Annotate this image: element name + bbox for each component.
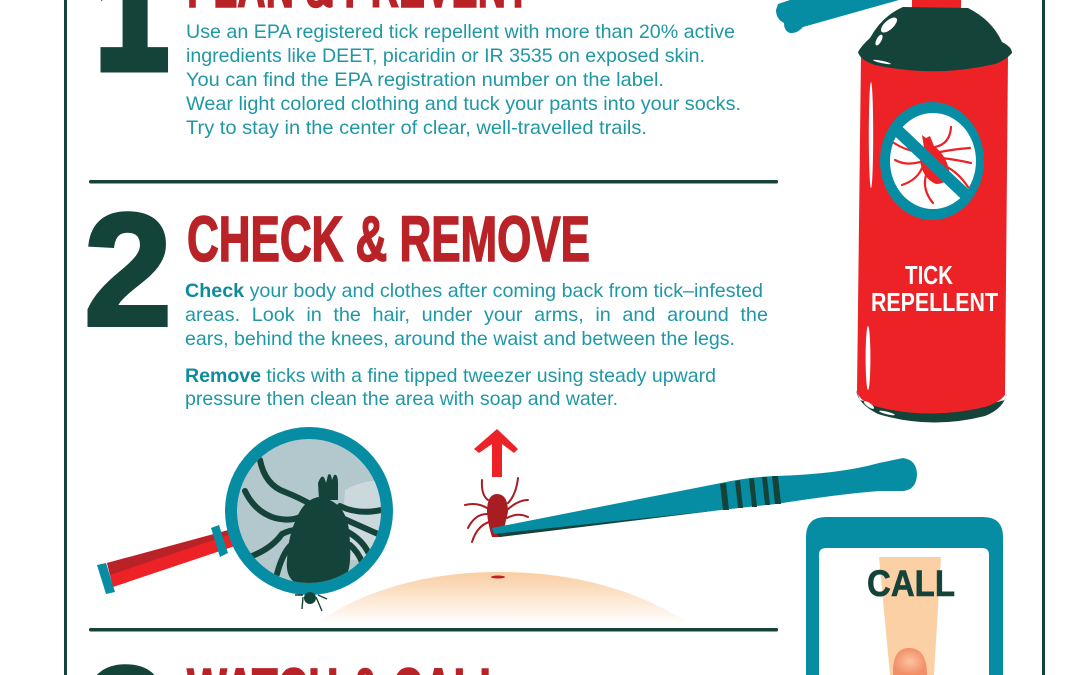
phone body	[806, 517, 1003, 675]
body text: check instructions: ears, behind the knees, around the waist and between the legs.	[185, 328, 735, 350]
body text: prevention advice: You can find the EPA registration number on the label.	[186, 69, 664, 91]
tweezers grip	[720, 476, 781, 510]
red tick	[894, 127, 971, 203]
body text: prevention advice: Use an EPA registered tick repellent with more than 20% active	[186, 21, 735, 43]
call label: CALL	[867, 563, 955, 604]
finger	[879, 557, 941, 675]
can nozzle	[912, 0, 961, 12]
numeral 2: 2	[84, 180, 172, 359]
body text: check instructions: Check your body and clothes after coming back from tick–infested	[185, 280, 763, 302]
icon: tick repellent spray can	[776, 0, 1012, 423]
body text: removal instructions	[185, 365, 716, 410]
prohibition bar	[896, 129, 969, 198]
fingernail	[893, 648, 927, 675]
body text: prevention advice: ingredients like DEET, picaridin or IR 3535 on exposed skin.	[186, 45, 705, 67]
can label: TICK	[905, 260, 953, 290]
icon: phone with finger	[806, 517, 1003, 675]
can label: REPELLENT	[871, 287, 998, 317]
section 1: plan and prevent	[96, 0, 741, 139]
tweezers	[492, 458, 917, 537]
heading: check and remove: CHECK & REMOVE	[187, 203, 590, 275]
tick bite mark	[491, 576, 505, 578]
skin mound	[315, 572, 690, 624]
section 2: check and remove	[84, 180, 768, 410]
body text: prevention advice: Try to stay in the center of clear, well-travelled trails.	[186, 117, 647, 139]
section 3: watch and call	[84, 633, 505, 675]
body text: prevention advice: Wear light colored clothing and tuck your pants into your socks.	[186, 93, 741, 115]
arrow: pull upward	[474, 429, 518, 477]
can label	[871, 260, 998, 317]
handle	[97, 525, 238, 594]
can body	[857, 55, 1008, 414]
icon: magnifying glass with tick	[97, 427, 393, 611]
no-tick symbol	[880, 102, 984, 220]
highlights	[863, 15, 899, 416]
bottom rim	[856, 390, 1007, 423]
lens	[225, 427, 393, 595]
body text: check instructions	[185, 280, 768, 350]
small tick held by tweezers	[465, 478, 528, 542]
can dome	[858, 7, 1012, 71]
applicator arm	[776, 0, 899, 33]
body text: prevention advice	[186, 21, 741, 139]
body text: removal instructions: pressure then clean the area with soap and water.	[185, 388, 618, 410]
body text: removal instructions: Remove ticks with a fine tipped tweezer using steady upward	[185, 365, 716, 387]
body text: check instructions: areas. Look in the hair, under your arms, in and around the	[185, 304, 768, 326]
second tick under lens	[295, 592, 327, 611]
large tick silhouette	[245, 460, 381, 585]
